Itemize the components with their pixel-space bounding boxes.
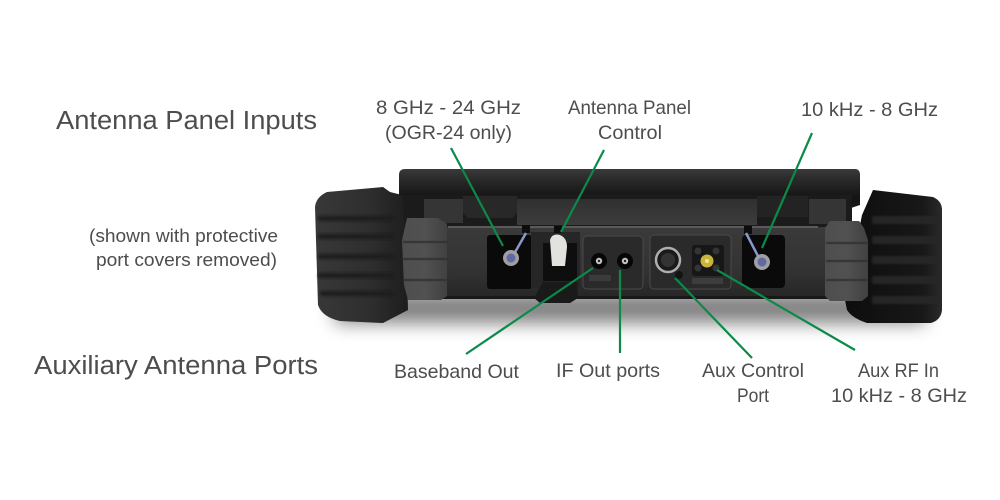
antenna panel control port [531, 226, 580, 303]
heading: Auxiliary Antenna Ports: Auxiliary Antenna Ports [34, 352, 318, 380]
label: Baseband Out: Baseband Out [394, 361, 520, 383]
left grip [402, 218, 447, 300]
IF and baseband port recess [583, 236, 643, 289]
left bumper [315, 187, 408, 323]
main body [420, 227, 832, 298]
hinge band [402, 195, 852, 229]
aux port recess [650, 235, 731, 289]
note: protective port covers: port covers removed) [96, 249, 277, 270]
heading: Antenna Panel Inputs: Antenna Panel Inputs [56, 107, 317, 135]
label: 8 GHz - 24 GHz: (OGR-24 only) [385, 122, 512, 144]
label: Antenna Panel Control [568, 97, 691, 144]
label: Antenna Panel Control: Antenna Panel [568, 97, 691, 119]
device photo illustration [315, 169, 942, 323]
label: 10 kHz - 8 GHz: 10 kHz - 8 GHz [801, 99, 938, 121]
left RF port [487, 225, 532, 289]
right RF port [742, 226, 785, 288]
label: 8 GHz - 24 GHz [376, 97, 521, 144]
label: Aux RF In [831, 360, 967, 407]
label: Aux RF In: Aux RF In [858, 360, 939, 382]
right grip [825, 221, 868, 301]
right bumper [845, 190, 942, 323]
label: IF Out ports: IF Out ports [556, 360, 660, 382]
label: Antenna Panel Control: Control [598, 122, 662, 144]
callout lines [451, 133, 855, 358]
label: 8 GHz - 24 GHz: 8 GHz - 24 GHz [376, 97, 521, 119]
device shadow [335, 293, 925, 323]
label: Aux Control Port [702, 360, 804, 407]
label: Aux Control Port: Port [737, 385, 770, 407]
lid [399, 169, 860, 210]
label: Aux Control Port: Aux Control [702, 360, 804, 382]
note: protective port covers [89, 225, 278, 270]
note: protective port covers: (shown with protective [89, 225, 278, 246]
label: Aux RF In: 10 kHz - 8 GHz [831, 385, 967, 407]
